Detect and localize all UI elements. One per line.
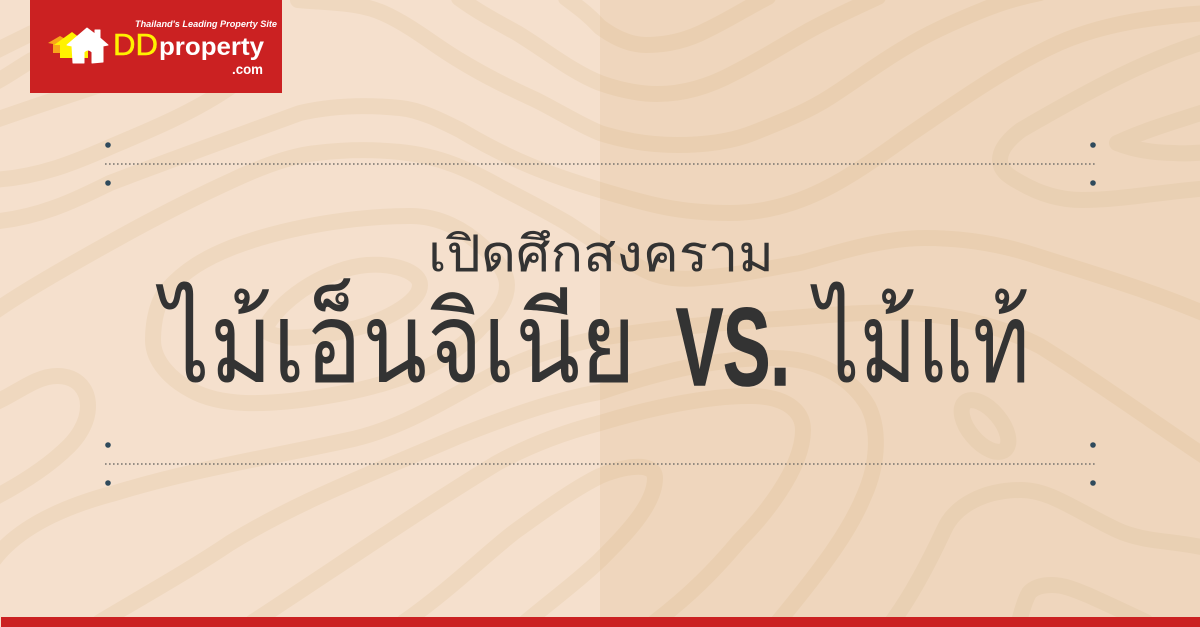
heading line 2: engineered wood: ไม้เอ็นจิเนีย <box>155 278 636 406</box>
wood grain pattern right <box>892 40 1200 622</box>
logo: DDproperty: property <box>159 33 264 61</box>
bottom divider with dots <box>105 442 1096 486</box>
logo domain: .com <box>232 61 263 77</box>
icon: orange house <box>48 36 74 53</box>
heading line 2: VS: VS. <box>676 286 790 409</box>
logo wordmark: DD <box>113 27 158 62</box>
heading line 1: เปิดศึกสงคราม <box>428 226 774 282</box>
panel: right wood tone overlay <box>600 0 1200 627</box>
bottom red bar <box>1 617 1200 627</box>
heading line 2: real wood: ไม้แท้ <box>810 281 1030 406</box>
icon: yellow house <box>54 32 88 58</box>
logo: DDproperty <box>30 0 282 93</box>
icon: white house <box>67 28 108 63</box>
logo tagline: Thailand's Leading Property Site <box>135 19 278 30</box>
top divider with dots <box>105 142 1096 186</box>
